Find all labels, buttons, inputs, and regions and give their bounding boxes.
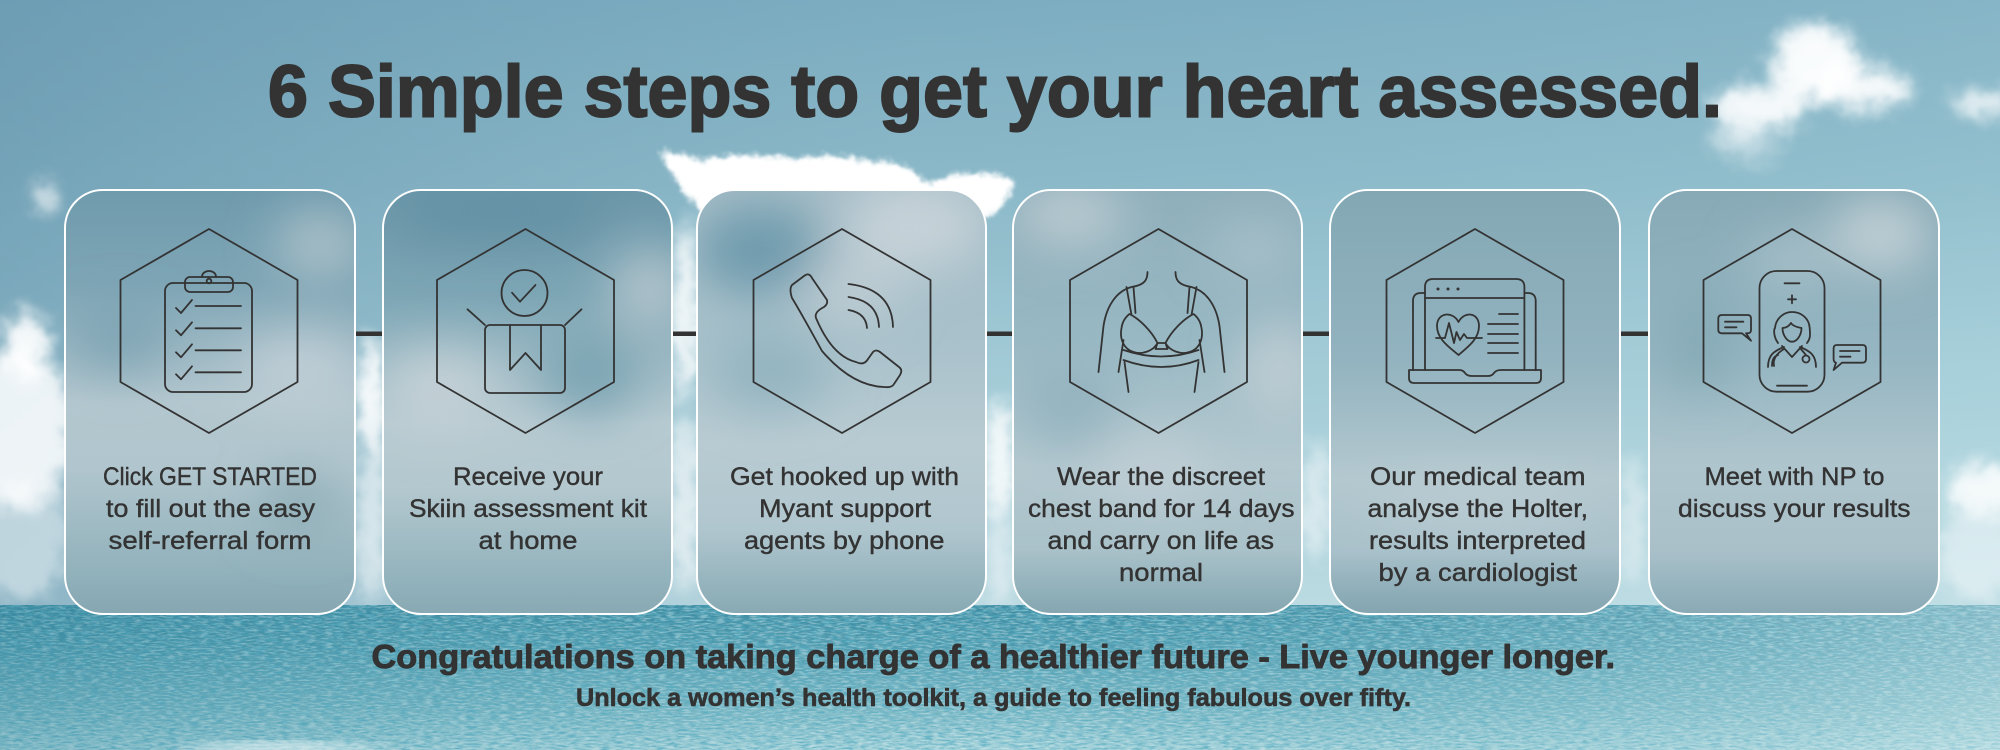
card outline bbox=[697, 190, 986, 614]
icon: hexagon with chest band on torso bbox=[1070, 229, 1247, 433]
title: 6 Simple steps to get your heart assessed. bbox=[268, 52, 1722, 132]
step 3 text bbox=[730, 463, 959, 555]
panel: step 1 bbox=[65, 190, 365, 614]
step 6 text: Meet with NP to bbox=[1704, 463, 1884, 491]
icon: hexagon with clipboard checklist bbox=[120, 229, 298, 433]
panel: step 5 bbox=[1330, 190, 1620, 614]
step 4 text: and carry on life as bbox=[1048, 527, 1274, 555]
card outline bbox=[383, 190, 672, 614]
step 4 text: chest band for 14 days bbox=[1028, 495, 1294, 523]
connector 3 bbox=[986, 332, 1013, 336]
panel: step 3 bbox=[695, 180, 986, 614]
panel: step 6 bbox=[1649, 190, 1939, 614]
icon: hexagon with doctor on phone and chat bubbles bbox=[1704, 229, 1880, 433]
step 5 text: Our medical team bbox=[1370, 463, 1586, 491]
card outline bbox=[1649, 190, 1939, 614]
closing headline: Congratulations on taking charge of a healthier future - Live younger longer. bbox=[372, 638, 1615, 675]
step 1 text: Click GET STARTED bbox=[103, 463, 317, 491]
card outline bbox=[1330, 190, 1620, 614]
step 2 text bbox=[409, 463, 647, 555]
card outline bbox=[1013, 190, 1302, 614]
card outline bbox=[65, 190, 355, 614]
step 5 text: by a cardiologist bbox=[1378, 559, 1577, 587]
step 6 text: discuss your results bbox=[1678, 495, 1910, 523]
connector 1 bbox=[355, 332, 383, 336]
connector 2 bbox=[672, 332, 697, 336]
step 5 text bbox=[1368, 463, 1588, 587]
step 2 text: Receive your bbox=[453, 463, 603, 491]
step 5 text: analyse the Holter, bbox=[1368, 495, 1588, 523]
step 3 text: Get hooked up with bbox=[730, 463, 959, 491]
step 6 text bbox=[1678, 463, 1910, 523]
panel: step 4 bbox=[1013, 185, 1320, 614]
step 2 text: at home bbox=[478, 527, 578, 555]
icon: hexagon with laptop and heart chart bbox=[1386, 229, 1564, 433]
connector 5 bbox=[1620, 332, 1649, 336]
step 5 text: results interpreted bbox=[1369, 527, 1586, 555]
connector 4 bbox=[1302, 332, 1330, 336]
step 1 text: self-referral form bbox=[108, 527, 312, 555]
step 3 text: agents by phone bbox=[744, 527, 944, 555]
step 1 text bbox=[103, 463, 317, 555]
step 3 text: Myant support bbox=[759, 495, 931, 523]
step 4 text: Wear the discreet bbox=[1057, 463, 1265, 491]
icon: hexagon with telephone handset bbox=[754, 229, 930, 433]
step 4 text bbox=[1028, 463, 1294, 587]
icon: hexagon with opened box bbox=[437, 229, 614, 433]
step 4 text: normal bbox=[1119, 559, 1203, 587]
step 1 text: to fill out the easy bbox=[106, 495, 316, 523]
step 2 text: Skiin assessment kit bbox=[409, 495, 647, 523]
closing subheading: Unlock a women’s health toolkit, a guide to feeling fabulous over fifty. bbox=[576, 684, 1411, 712]
panel: step 2 bbox=[380, 190, 690, 614]
